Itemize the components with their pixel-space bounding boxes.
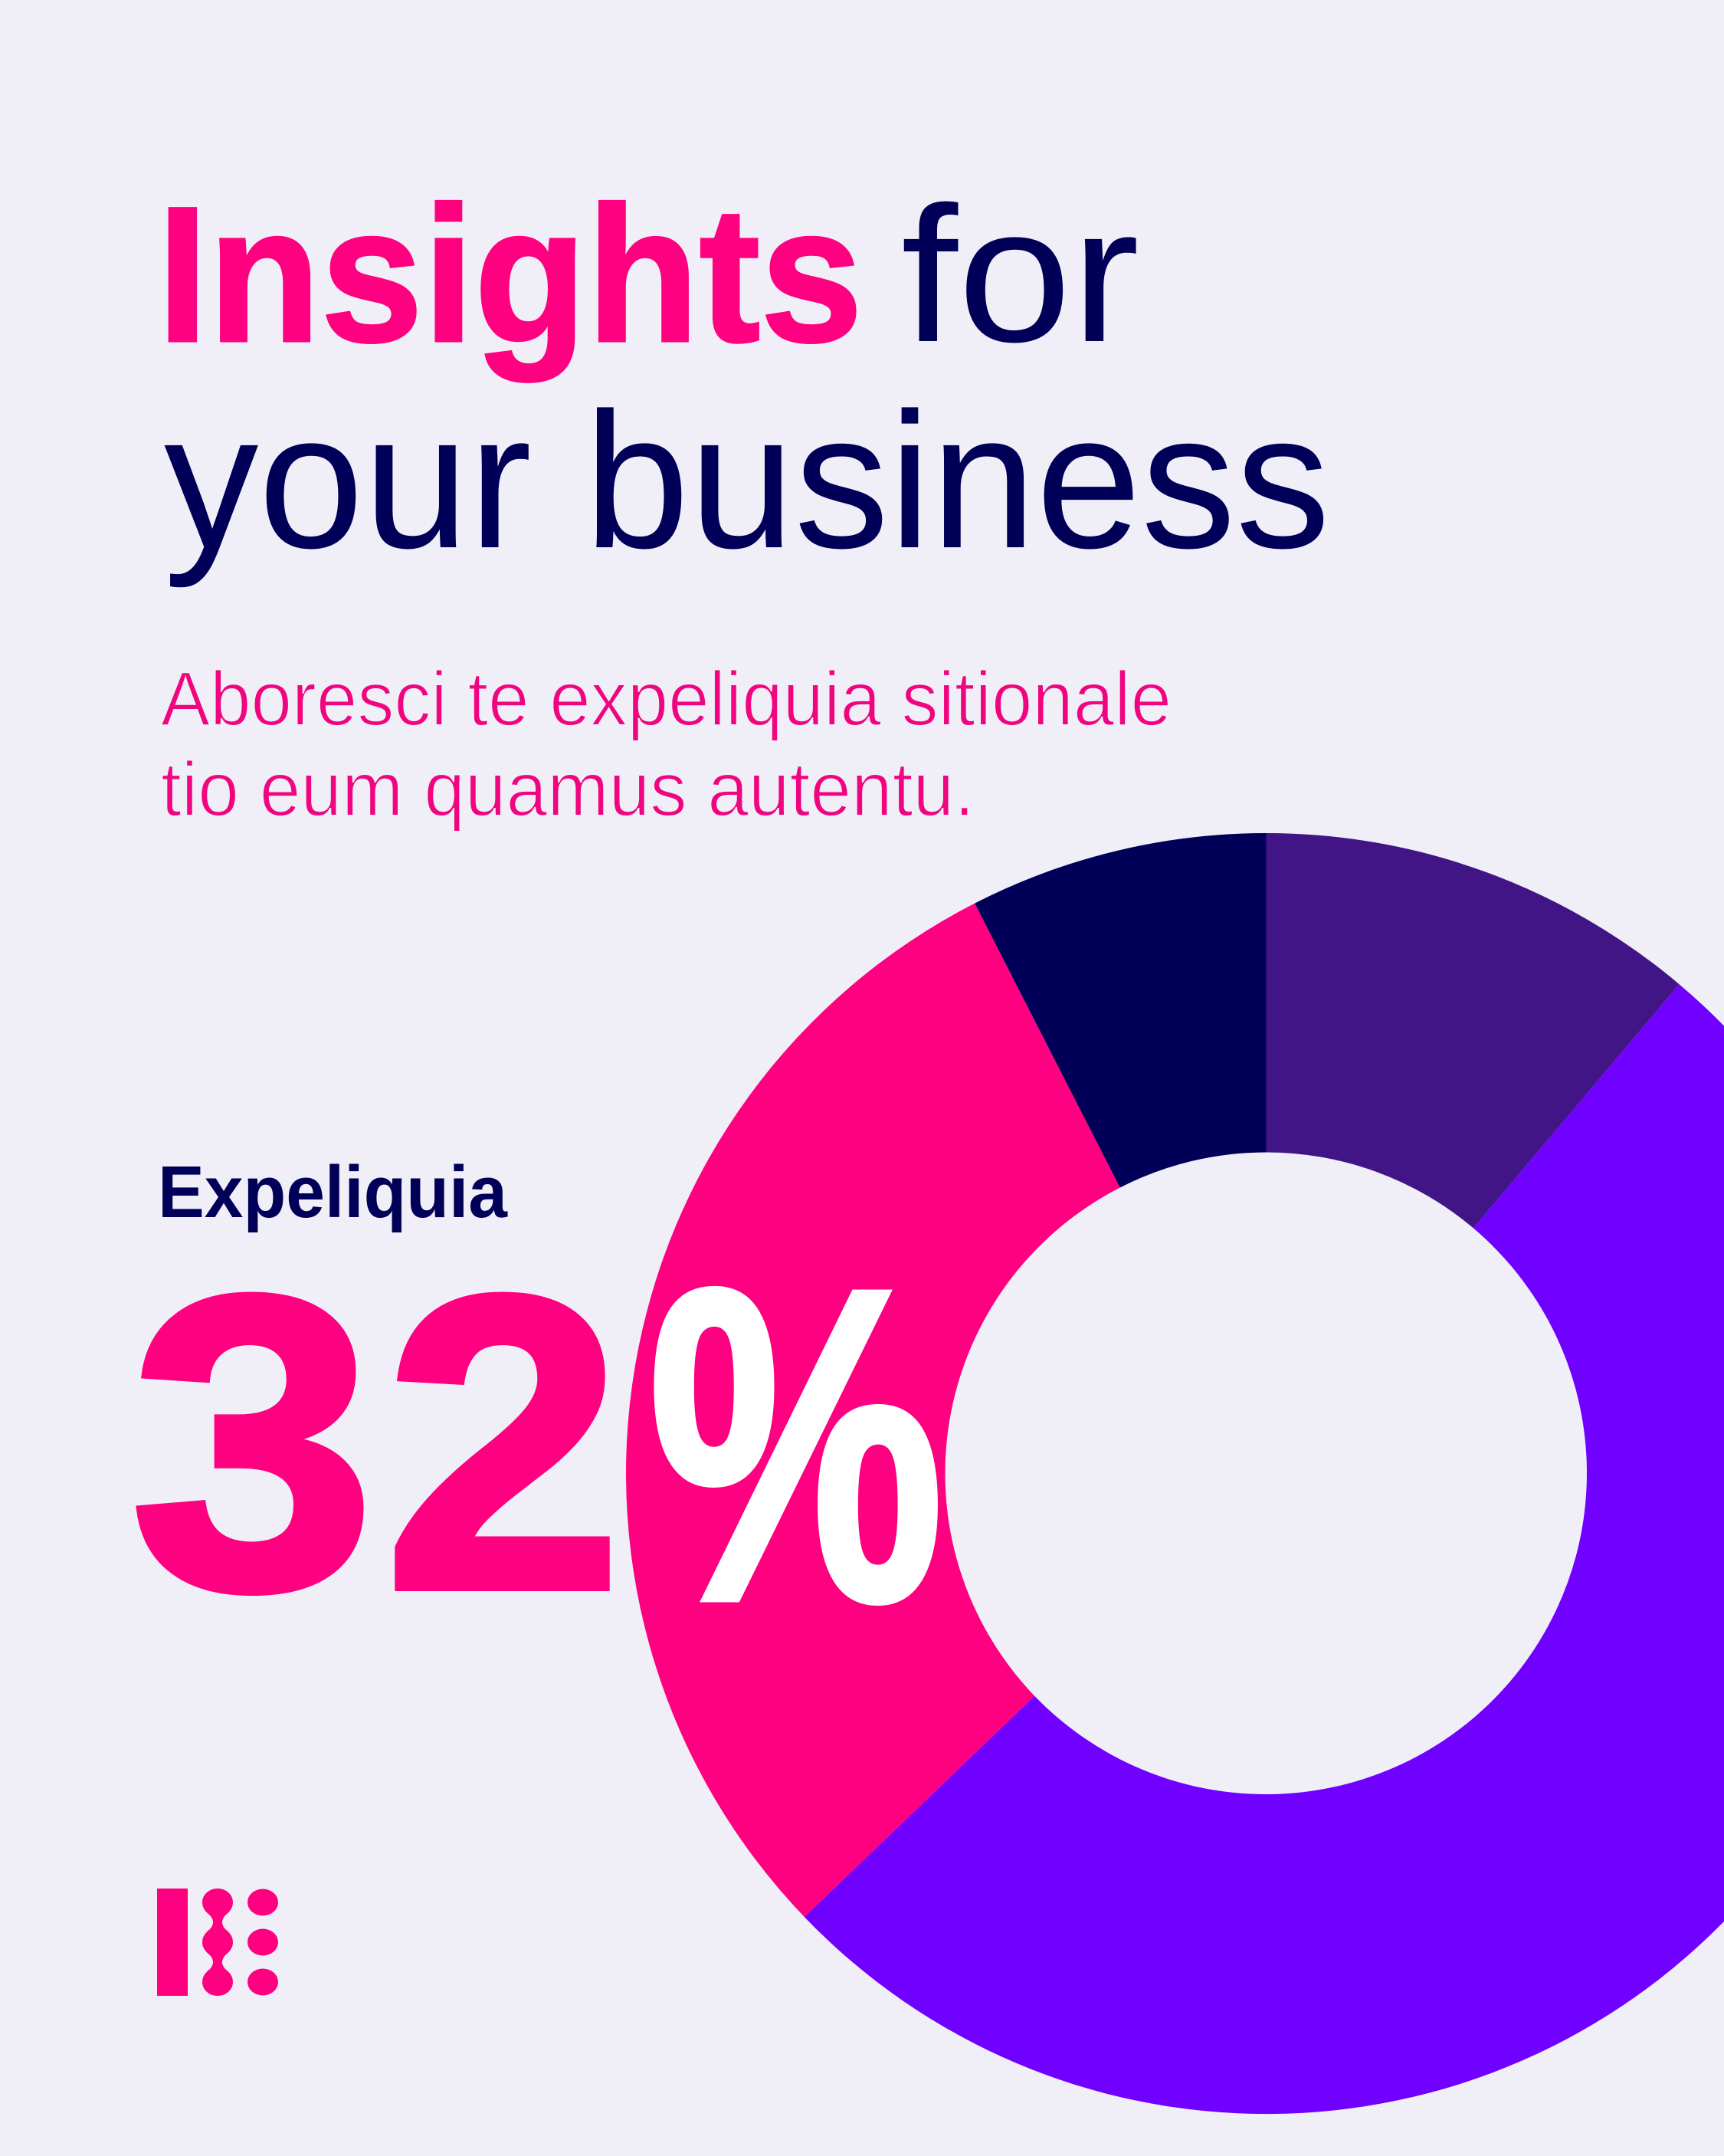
logo dots [247, 1889, 278, 1996]
title [157, 167, 1330, 589]
segment: navy [975, 833, 1266, 1188]
digit: 2: 2 [384, 1210, 623, 1676]
segment: violet [805, 984, 1724, 2114]
subtitle: tio eum quamus autentu. [161, 747, 975, 832]
metric value: 32% [130, 1196, 944, 1693]
title word: Insights: Insights [157, 167, 863, 382]
metric label: Expeliquia [158, 1151, 508, 1233]
segment: pink [626, 904, 1120, 1917]
logo linked dots [202, 1889, 233, 1996]
subtitle: Aboresci te expeliquia sitionale [161, 656, 1172, 742]
logo [157, 1889, 278, 1996]
donut chart [626, 833, 1724, 2114]
logo bar [157, 1889, 188, 1996]
digit: 3: 3 [130, 1210, 375, 1676]
title line: your business: your business [164, 373, 1330, 589]
title word: for: for [901, 167, 1139, 382]
percent sign: % [648, 1196, 944, 1693]
segment: dark purple [1266, 833, 1680, 1228]
